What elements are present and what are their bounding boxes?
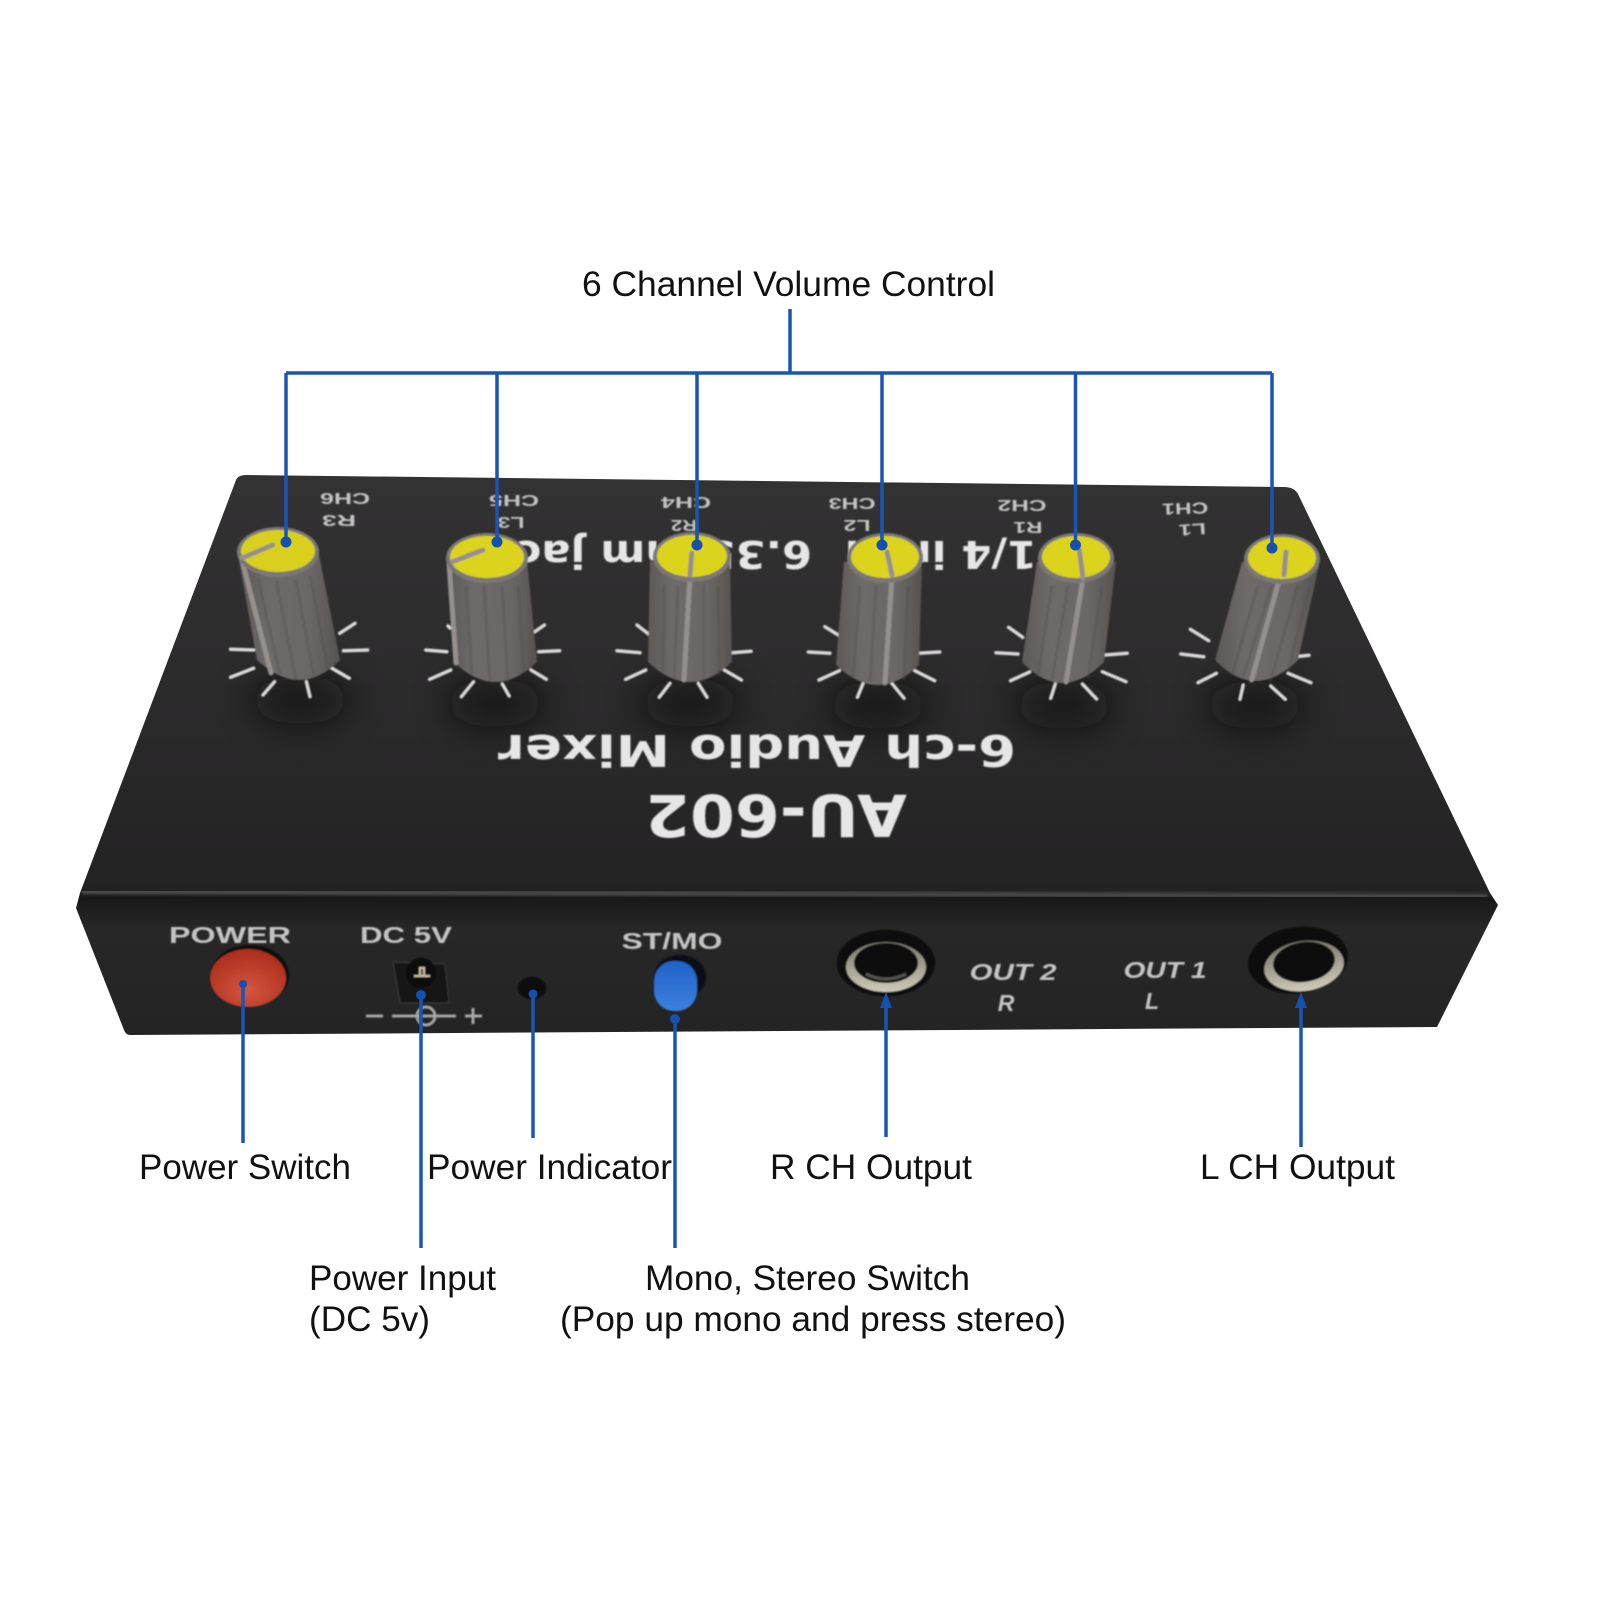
front panel labels: OUT 1 (1124, 957, 1206, 983)
knob CH3 (808, 533, 940, 698)
front panel labels: L (1145, 988, 1159, 1014)
front panel labels: DC 5V (360, 922, 453, 948)
DC power jack (393, 958, 449, 1003)
front panel labels: R (998, 990, 1015, 1016)
product name 6-ch Audio Mixer: 6-ch Audio Mixer (498, 724, 1016, 775)
channel labels: R2 (671, 516, 697, 533)
channel labels: CH1 (1162, 498, 1208, 517)
power switch button (210, 945, 289, 1007)
channel labels: CH2 (997, 496, 1046, 513)
label: Power Input: Power Input (309, 1259, 496, 1298)
leader: R channel output (880, 992, 892, 1137)
label: Power Switch: Power Switch (139, 1148, 351, 1187)
leader: power indicator (528, 990, 538, 1138)
channel labels: R3 (322, 511, 356, 528)
knob CH5 (426, 533, 560, 697)
device front face (76, 893, 1498, 1035)
front panel labels (169, 922, 1206, 1016)
channel labels: R1 (1013, 518, 1042, 535)
leader: L channel output (1295, 992, 1307, 1147)
device top face (80, 475, 1490, 893)
channel labels: CH5 (489, 491, 539, 508)
knob shadows (250, 676, 1305, 729)
polarity symbol (366, 1007, 482, 1025)
jack size text: 1/4 inch (845, 532, 1037, 576)
leader: mono stereo switch (670, 1014, 680, 1248)
knob CH1 (1181, 534, 1320, 699)
jack size text: 6.35 mm jack (486, 532, 812, 576)
label: Power Indicator: Power Indicator (427, 1148, 672, 1187)
front edge highlight (82, 892, 1488, 896)
channel labels: CH3 (828, 494, 876, 511)
power indicator LED (518, 977, 546, 999)
mixer device photo illustration (76, 475, 1498, 1035)
knob CH2 (996, 533, 1127, 699)
label: R CH Output: R CH Output (770, 1148, 972, 1187)
front panel labels: ST/MO (622, 928, 722, 954)
channel labels (320, 489, 1208, 538)
label: L CH Output: L CH Output (1200, 1148, 1395, 1187)
leader: power input (416, 990, 426, 1248)
label: Power Input: (DC 5v) (309, 1300, 430, 1339)
channel labels: CH4 (661, 493, 711, 510)
L output jack (1244, 920, 1352, 1000)
front panel labels: OUT 2 (970, 959, 1057, 985)
label: Power Input (309, 1259, 496, 1339)
label: Mono, Stereo Switch: (Pop up mono and press stereo) (560, 1300, 1066, 1339)
bracket: 6 channel volume control (280, 309, 1278, 554)
channel labels: CH6 (320, 489, 370, 506)
label: Mono, Stereo Switch (560, 1259, 1066, 1339)
R output jack (837, 930, 935, 996)
jack size text (486, 532, 1037, 576)
front panel labels: POWER (169, 922, 292, 948)
label: Mono, Stereo Switch: Mono, Stereo Switch (645, 1259, 970, 1298)
channel labels: L1 (1178, 519, 1206, 538)
model name AU-602: AU-602 (645, 781, 907, 849)
channel labels: L3 (497, 513, 524, 530)
channel labels: L2 (843, 516, 870, 533)
mono stereo button (654, 955, 706, 1011)
knob CH6 (231, 527, 368, 697)
leader: power switch (239, 980, 247, 1143)
knob CH4 (617, 532, 751, 697)
title: 6 Channel Volume Control: 6 Channel Volume Control (582, 265, 995, 304)
